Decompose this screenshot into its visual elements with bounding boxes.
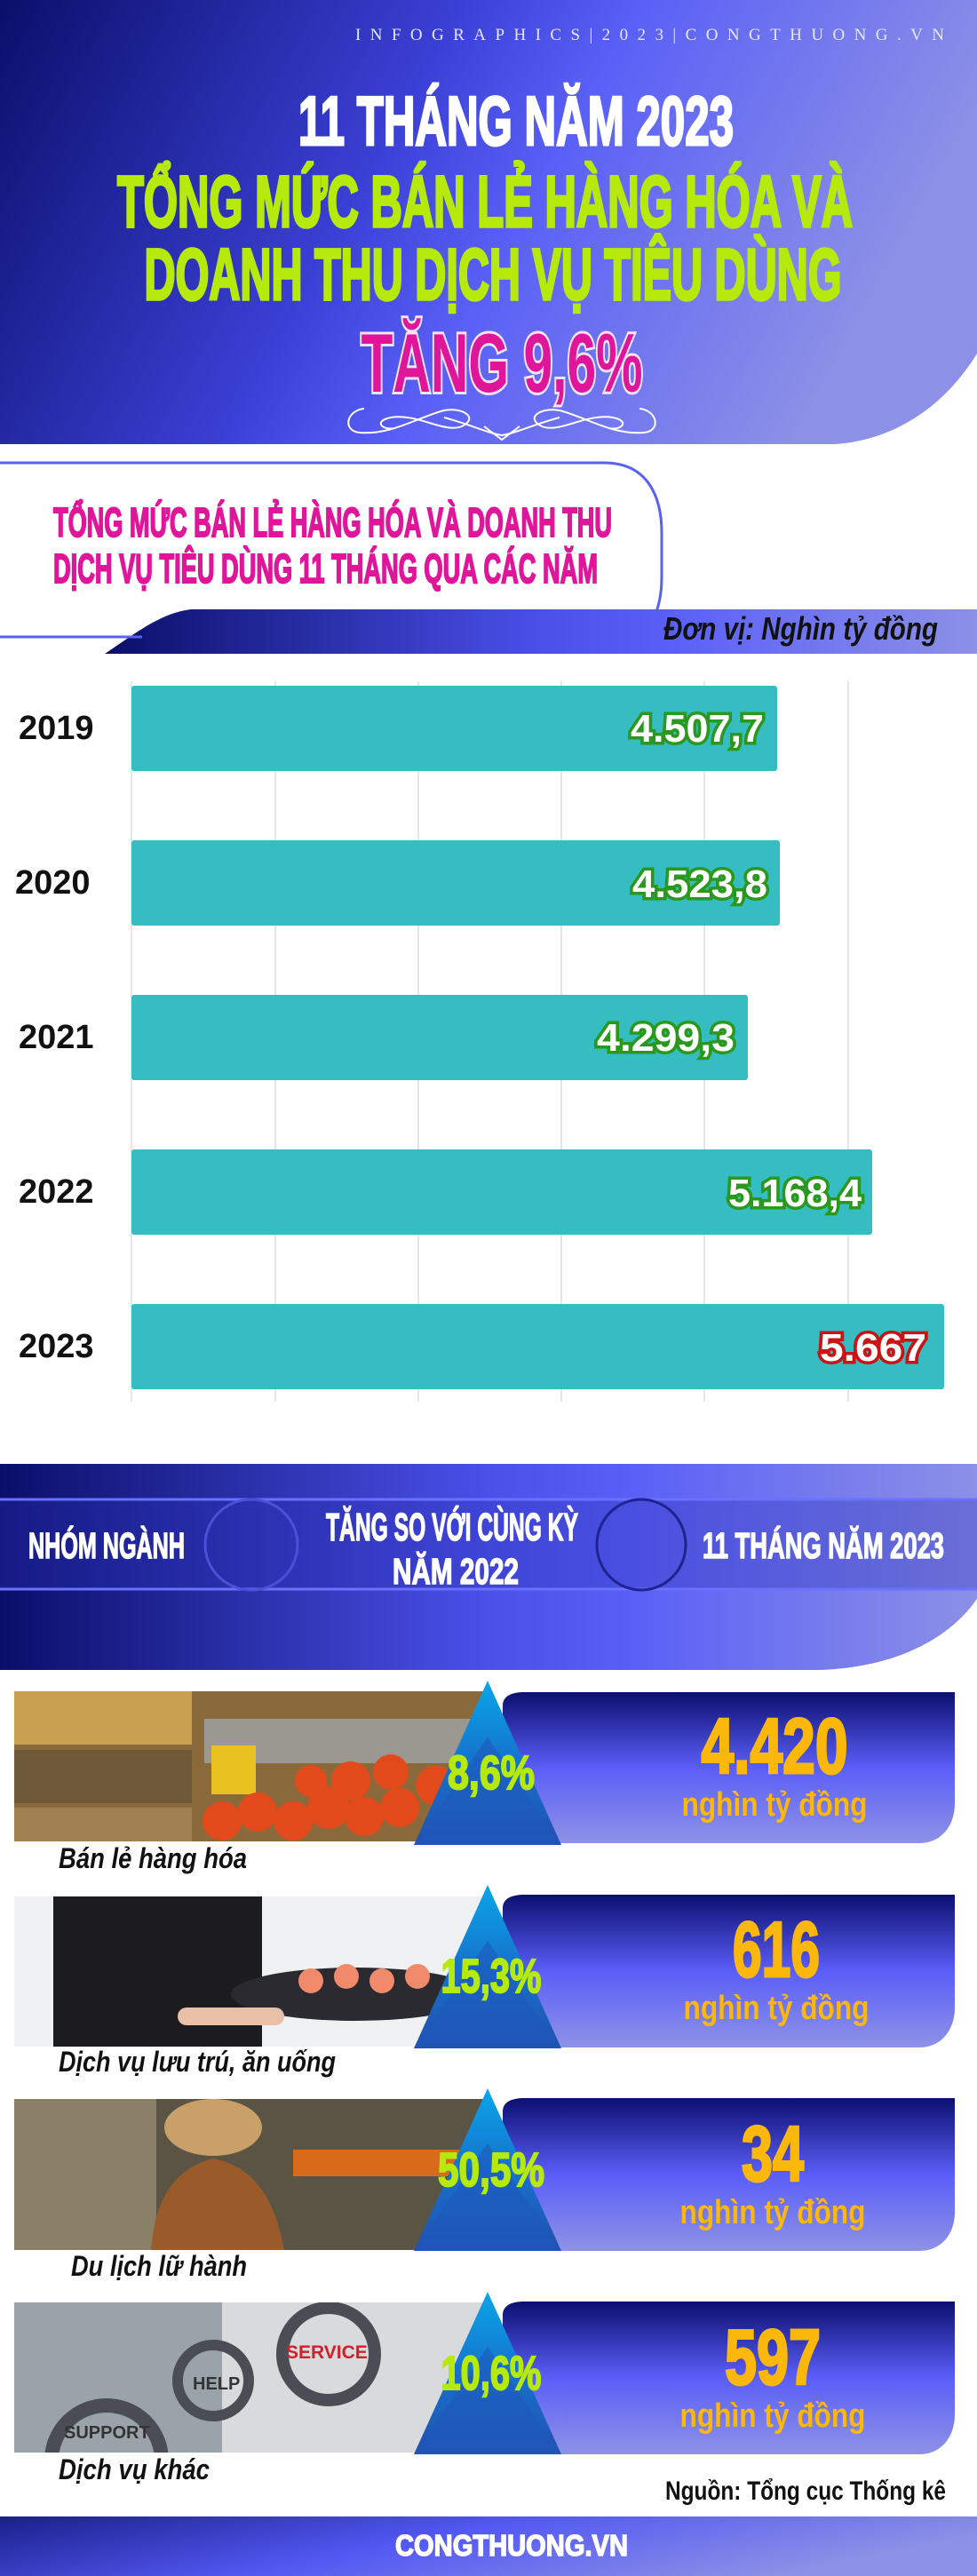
row 3: Du lịch lữ hành: nghìn tỷ đồng	[680, 2194, 865, 2231]
subtitle text: TỔNG MỨC BÁN LẺ HÀNG HÓA VÀ DOANH THU	[53, 499, 612, 545]
header background	[0, 0, 977, 444]
row 1: Bán lẻ hàng hóa: 4.420	[702, 1702, 847, 1790]
unit bar	[0, 609, 977, 654]
row 2: Dịch vụ lưu trú, ăn uống: Dịch vụ lưu trú, ăn uống	[59, 2046, 336, 2078]
ornament	[348, 409, 655, 440]
bar 2019: 4.507,7	[631, 707, 764, 751]
title: 11 tháng năm 2023: 11 THÁNG NĂM 2023	[298, 82, 734, 160]
row 3: Du lịch lữ hành	[14, 2088, 955, 2282]
row 1: Bán lẻ hàng hóa	[14, 1681, 955, 1874]
bar 2023: 5.667	[820, 1326, 926, 1370]
bar 2023: 2023	[19, 1328, 94, 1365]
bar 2022	[19, 1149, 872, 1235]
photo: gears: HELP	[193, 2374, 240, 2394]
row 2: Dịch vụ lưu trú, ăn uống: nghìn tỷ đồng	[684, 1990, 869, 2027]
bar 2019	[19, 686, 777, 771]
section header: table heading: TĂNG SO VỚI CÙNG KỲ	[326, 1505, 578, 1549]
row 4: Dịch vụ khác: nghìn tỷ đồng	[680, 2397, 865, 2435]
row 4: Dịch vụ khác: 597	[725, 2313, 821, 2401]
row 2: Dịch vụ lưu trú, ăn uống: 616	[733, 1905, 820, 1993]
row 2: Dịch vụ lưu trú, ăn uống	[14, 1885, 955, 2078]
section header: table heading	[0, 1464, 977, 1670]
photo: traveller	[14, 2099, 485, 2250]
row 2: Dịch vụ lưu trú, ăn uống: 15,3%	[441, 1950, 542, 2003]
row 1: Bán lẻ hàng hóa: nghìn tỷ đồng	[682, 1786, 867, 1824]
title: tăng 9,6%: TĂNG 9,6%	[361, 316, 643, 409]
top tagline: INFOGRAPHICS|2023|CONGTHUONG.VN	[355, 26, 944, 44]
photo: gears: SUPPORT	[64, 2423, 150, 2443]
photo: waiter with food	[14, 1896, 485, 2047]
bar 2020	[15, 840, 780, 926]
row 1: Bán lẻ hàng hóa: Bán lẻ hàng hóa	[59, 1842, 247, 1874]
bar 2022: 2022	[19, 1173, 94, 1211]
bar chart	[15, 681, 944, 1402]
row 4: Dịch vụ khác: 10,6%	[441, 2347, 542, 2400]
bar 2020: 4.523,8	[632, 863, 767, 906]
row 3: Du lịch lữ hành: Du lịch lữ hành	[71, 2250, 247, 2282]
row 1: Bán lẻ hàng hóa: 8,6%	[448, 1746, 535, 1800]
bar 2022: 5.168,4	[728, 1172, 862, 1215]
subtitle panel	[0, 463, 662, 648]
row 4: Dịch vụ khác	[14, 2292, 955, 2484]
section header: table heading: NĂM 2022	[393, 1551, 519, 1592]
row 3: Du lịch lữ hành: 34	[742, 2110, 804, 2198]
bar 2021	[19, 995, 748, 1080]
subtitle panel: DỊCH VỤ TIÊU DÙNG 11 THÁNG QUA CÁC NĂM	[53, 545, 598, 592]
photo: gears: SERVICE	[286, 2342, 368, 2363]
bar 2021: 2021	[19, 1019, 94, 1056]
photo: gears	[14, 2302, 483, 2453]
bar 2023	[19, 1304, 944, 1389]
bar 2021: 4.299,3	[597, 1016, 735, 1060]
section header: table heading: NHÓM NGÀNH	[28, 1525, 185, 1566]
footer: CONGTHUONG.VN	[395, 2529, 628, 2562]
row 4: Dịch vụ khác: Dịch vụ khác	[59, 2453, 210, 2485]
footer	[0, 2516, 977, 2576]
bar 2019: 2019	[19, 710, 94, 747]
row 3: Du lịch lữ hành: 50,5%	[438, 2143, 544, 2197]
photo: supermarket	[14, 1691, 485, 1841]
bar 2020: 2020	[15, 864, 91, 902]
